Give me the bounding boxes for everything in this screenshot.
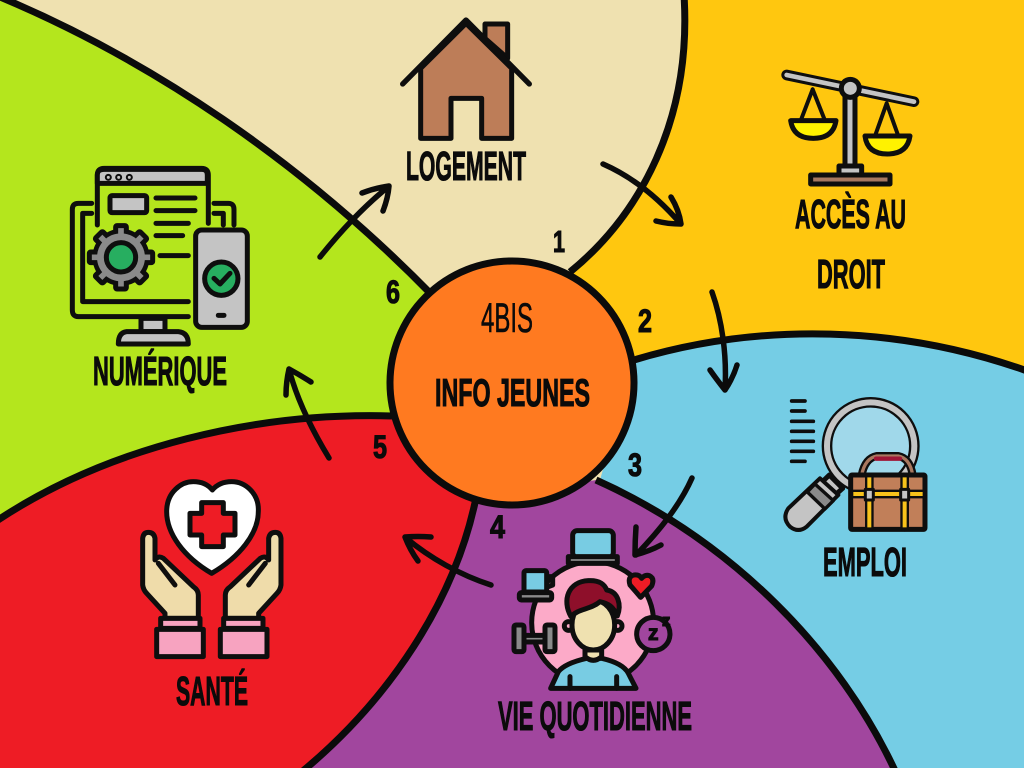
number 3: 3 (628, 447, 642, 483)
number 4: 4 (490, 509, 505, 545)
icon: digital devices (72, 168, 247, 344)
icon: scales (787, 75, 914, 184)
icon: sleep z letters: z (662, 611, 670, 630)
number 2: 2 (638, 303, 652, 339)
arrow: vie quotidienne to santé (405, 536, 491, 585)
icon: daily life person (514, 531, 670, 688)
panel: numérique background (0, 0, 432, 522)
number 1: 1 (553, 224, 565, 259)
panel: emploi background (600, 334, 1024, 768)
text: 4BIS: 4BIS (481, 294, 533, 341)
panel: accès au droit background (570, 0, 1024, 380)
icon: house (403, 20, 529, 138)
label: accès au droit: ACCÈS AU (795, 191, 906, 237)
arrow: logement to accès au droit (603, 164, 681, 224)
arrow: accès au droit to emploi (710, 292, 737, 390)
icon: magnifier and briefcase (785, 401, 925, 530)
text: INFO JEUNES: INFO JEUNES (435, 372, 590, 415)
panel: santé background (0, 416, 476, 768)
icon: hands holding heart (143, 482, 281, 657)
arrow: numérique to logement (320, 186, 389, 257)
arrow: emploi to vie quotidienne (635, 478, 692, 555)
label: emploi: EMPLOI (823, 539, 907, 585)
label: accès au droit (795, 191, 906, 297)
label: numérique: NUMÉRIQUE (93, 348, 227, 394)
arrow: santé to numérique (286, 369, 329, 458)
panel: vie quotidienne background (298, 480, 897, 768)
label: santé: SANTÉ (176, 668, 248, 714)
icon: sleep z letters (648, 611, 670, 645)
label: accès au droit: DROIT (817, 251, 885, 297)
label: logement: LOGEMENT (406, 143, 526, 189)
number 6: 6 (386, 274, 400, 310)
central circle: 4BIS Info Jeunes (390, 261, 634, 505)
number 5: 5 (373, 429, 387, 465)
icon: sleep z letters: z (648, 622, 658, 645)
label: vie quotidienne: VIE QUOTIDIENNE (498, 693, 692, 739)
